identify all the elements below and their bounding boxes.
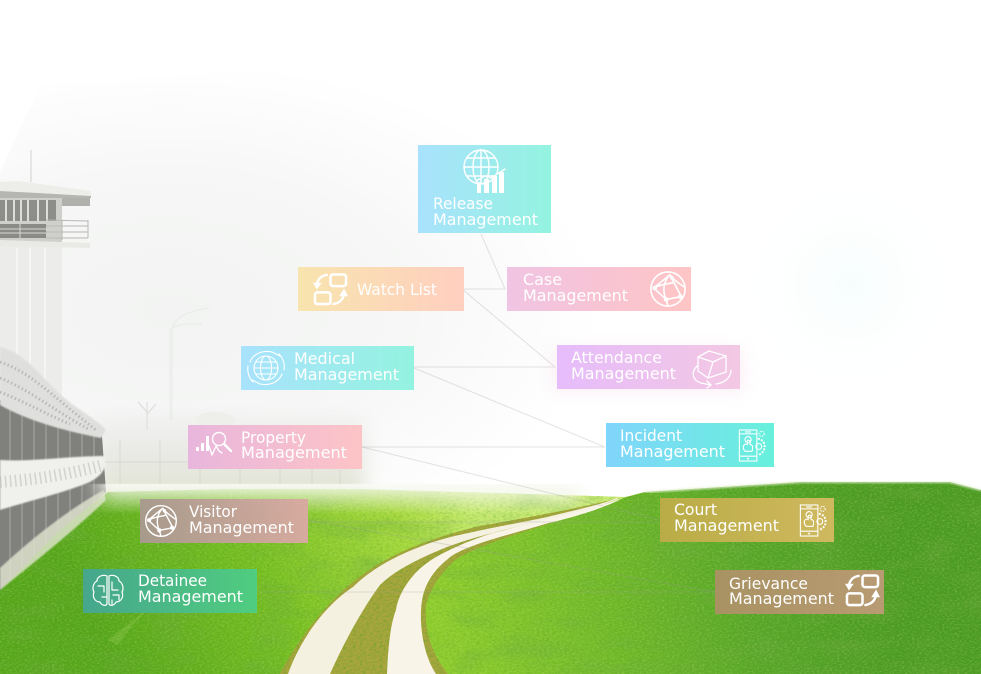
distant fence and trees <box>95 402 365 495</box>
icon: magnifier with bars <box>196 432 231 455</box>
label: Management <box>189 518 294 537</box>
card: Detainee Management <box>83 569 257 613</box>
card: Watch List <box>298 267 464 311</box>
pale patch on left field <box>108 607 150 645</box>
watch tower <box>0 150 91 405</box>
label: Management <box>571 364 676 383</box>
label: Management <box>674 516 779 535</box>
icon: rotating globe <box>248 351 284 385</box>
razor wire: middle <box>0 456 105 510</box>
icon: circuit brain <box>93 575 123 605</box>
dirt road <box>270 495 630 674</box>
card: Incident Management <box>606 423 774 467</box>
card: Medical Management <box>241 346 414 390</box>
icon: network sphere <box>651 272 685 306</box>
label: Visitor <box>189 502 237 521</box>
label: Management <box>138 587 243 606</box>
label: Release <box>433 194 493 213</box>
background: fog behind prison <box>0 50 970 500</box>
icon: exchange loop <box>845 575 880 605</box>
card: Release Management <box>418 145 551 233</box>
icon: rotating cube <box>693 351 731 388</box>
card: Case Management <box>507 267 691 311</box>
left track <box>288 498 618 674</box>
label: Management <box>241 443 347 462</box>
infographic canvas <box>0 145 981 674</box>
label: Attendance <box>571 348 662 367</box>
label: Court <box>674 500 717 519</box>
label: Management <box>294 365 399 384</box>
card: Attendance Management <box>553 345 743 392</box>
olive verge <box>280 498 620 674</box>
icon: network sphere <box>146 506 176 536</box>
card: Grievance Management <box>715 570 884 614</box>
grass field <box>0 480 981 674</box>
horizon haze <box>100 484 580 514</box>
label: Management <box>729 589 834 608</box>
right field <box>421 482 981 674</box>
grass texture <box>0 480 981 674</box>
label: Management <box>523 286 628 305</box>
card: Court Management <box>660 498 834 542</box>
label: Detainee <box>138 571 207 590</box>
connector lines <box>257 234 715 592</box>
hill base and left field <box>0 482 981 674</box>
label: Case <box>523 270 562 289</box>
card: Visitor Management <box>140 499 308 543</box>
label: Watch List <box>357 280 437 299</box>
street lamp <box>170 308 209 420</box>
label: Grievance <box>729 574 808 593</box>
icon: globe with chart <box>464 150 505 193</box>
label: Property <box>241 428 306 447</box>
verge texture <box>282 500 612 674</box>
right hill top edge <box>645 482 981 492</box>
razor wire: top <box>0 347 106 438</box>
card: Property Management <box>188 425 362 469</box>
label: Medical <box>294 349 355 368</box>
icon: exchange loop <box>313 274 348 304</box>
perimeter fence <box>0 400 106 595</box>
icon: phone with gear <box>739 430 765 461</box>
icon: phone with gear <box>800 505 826 536</box>
right track <box>387 498 623 674</box>
label: Management <box>620 442 725 461</box>
label: Management <box>433 210 538 229</box>
label: Incident <box>620 426 682 445</box>
razor wire: bottom <box>0 490 106 590</box>
